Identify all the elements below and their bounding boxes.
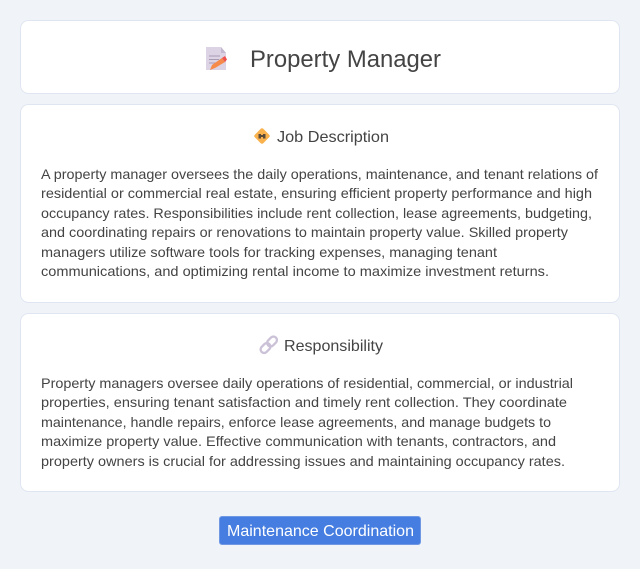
text block: responsibility: Property managers oversee daily operations of residential, commercial, or industrial [41,375,573,391]
text block: job description: communications, and optimizing rental income to maximize investment returns. [41,263,549,279]
panel: responsibility [20,314,620,492]
icon: orange diamond sign [254,128,270,144]
heading: Job Description: Job Description [277,129,389,146]
icon: chain link [259,335,278,354]
button: Maintenance Coordination: Maintenance Coordination [227,523,414,540]
heading: Responsibility: Responsibility [284,338,383,355]
text block: job description: A property manager oversees the daily operations, maintenance, and tenant relations of [41,166,598,182]
text block: job description: occupancy rates. Responsibilities include rent collection, lease agreements, budgeting, [41,205,592,221]
heading: Property Manager: Property Manager [250,46,441,73]
text block: job description: and coordinating repairs or renovations to maintain property value. Skilled property [41,224,568,240]
panel: title [20,20,620,94]
text block: responsibility: property owners is crucial for addressing issues and maintaining occupancy rates. [41,453,565,469]
icon: document with pencil [206,47,227,70]
text block: job description: managers utilize software tools for tracking expenses, managing tenant [41,244,497,260]
button: Maintenance Coordination [220,516,420,544]
text block: job description: residential or commercial real estate, ensuring efficient property performance and high [41,185,592,201]
text block: responsibility: maximize property value. Effective communication with tenants, contractors, and [41,433,556,449]
text block: responsibility: properties, ensuring tenant satisfaction and timely rent collection. They coordinate [41,394,567,410]
text block: responsibility [41,375,573,469]
text block: job description [41,166,598,279]
panel: job description [20,104,620,302]
text block: responsibility: maintenance, handle repairs, enforce lease agreements, and manage budgets to [41,414,551,430]
